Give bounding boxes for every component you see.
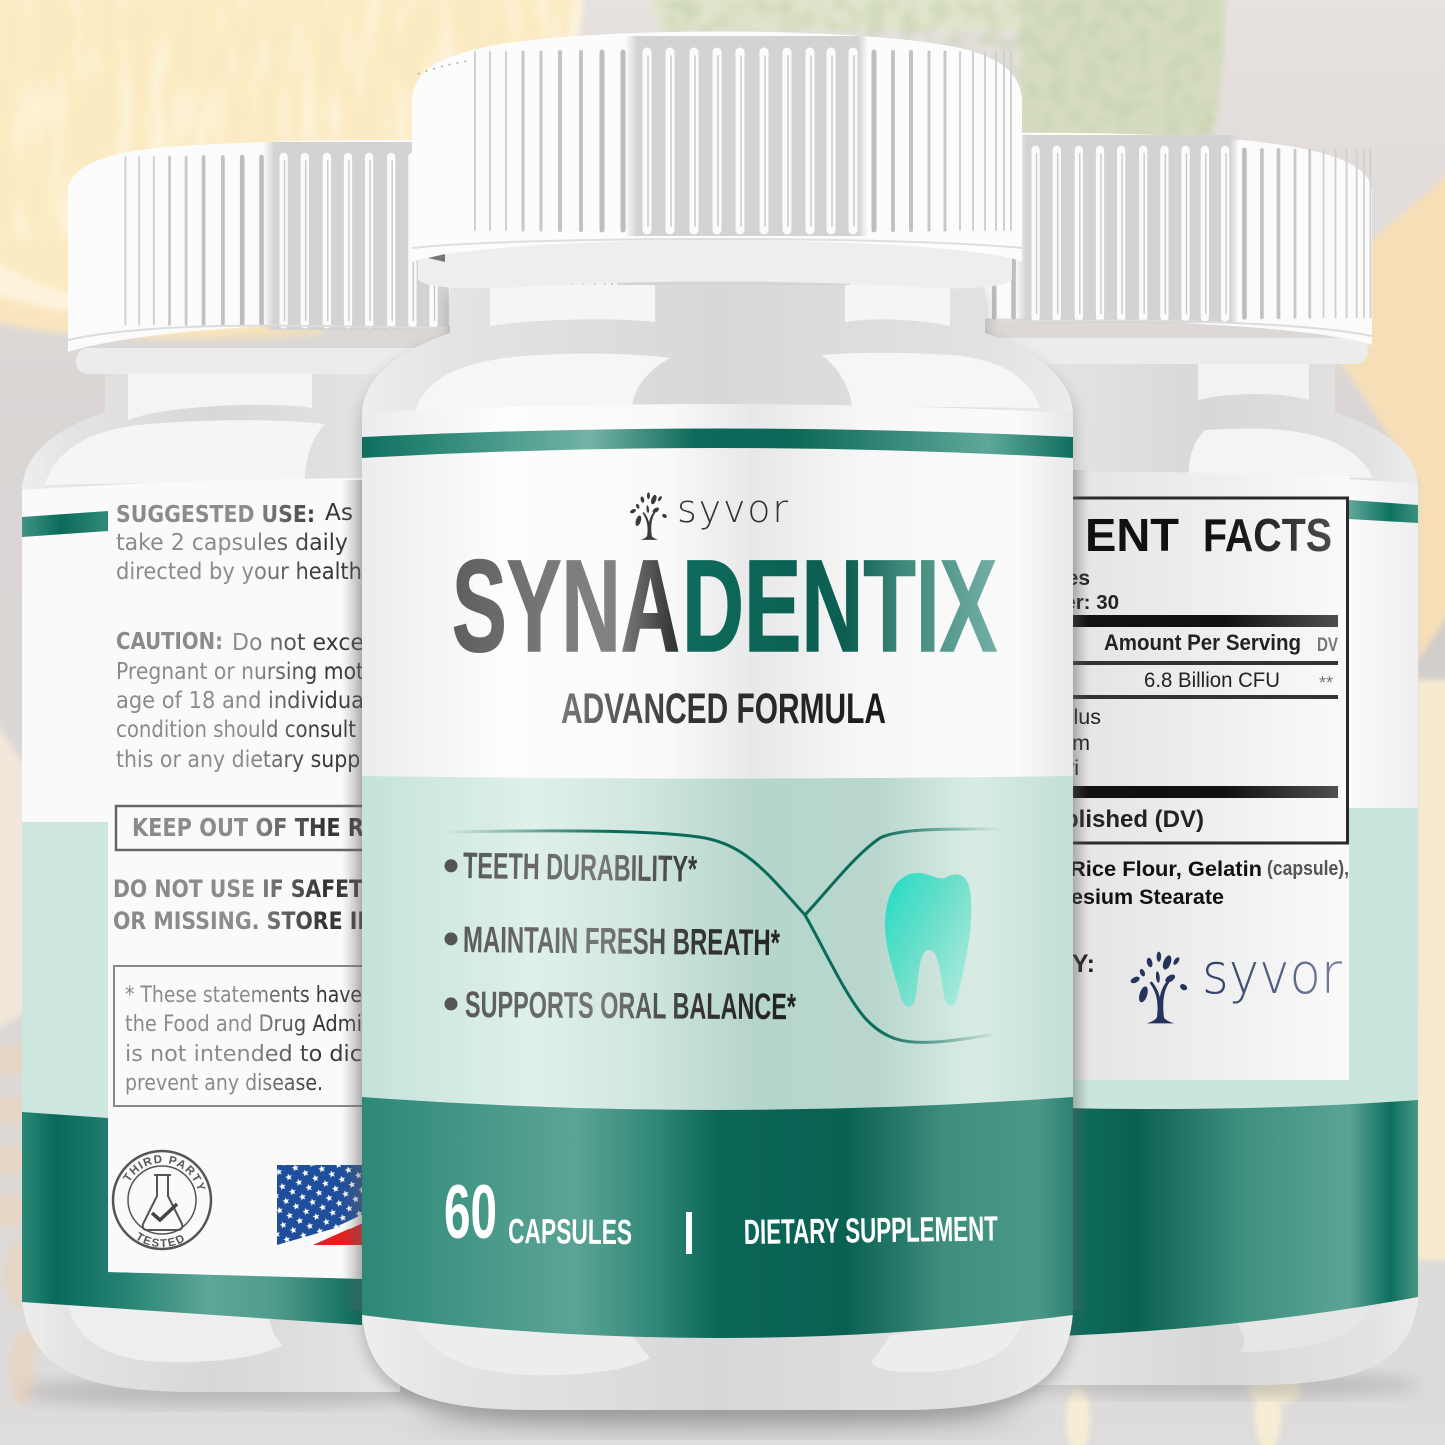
other ingredients: Magnesium Stearate: [1015, 885, 1224, 909]
background: pale left wedge: [0, 700, 28, 1040]
dietary supplement: DIETARY SUPPLEMENT: [744, 1209, 998, 1252]
neck reflections: [490, 285, 950, 326]
title: SYNA: [452, 532, 680, 679]
benefit two: [444, 919, 781, 963]
right label green: [1060, 1100, 1418, 1336]
caution text: age of 18 and individua: [116, 688, 364, 714]
benefit one: TEETH DURABILITY*: [463, 845, 698, 890]
brand logo: [630, 487, 788, 540]
suggested use text: directed by your health: [116, 559, 362, 585]
subtitle: ADVANCED FORMULA: [561, 685, 886, 733]
strain list: Lactobacillus: [977, 705, 1101, 729]
syvor logo: syvor: [1202, 942, 1342, 1007]
left neck highlight: [128, 372, 312, 420]
title: [452, 532, 997, 679]
benefit three: SUPPORTS ORAL BALANCE*: [465, 984, 797, 1027]
background: pale seeds at lower right: [1066, 1376, 1301, 1445]
left bottle: [22, 140, 620, 1412]
neck ring: [418, 236, 1012, 288]
right neck highlight: [1198, 352, 1309, 400]
disclaimer box: * These statements have: [125, 983, 362, 1008]
suggested use text: [116, 500, 362, 585]
left label stripe: [22, 511, 108, 537]
caution text: [116, 629, 366, 773]
caution text: this or any dietary suppl: [116, 747, 366, 773]
right shoulder highlight: [1189, 428, 1373, 478]
center label white: [362, 404, 1073, 800]
left white panel: [108, 486, 400, 1280]
benefits list: [444, 845, 797, 1027]
center cap: [412, 32, 1022, 262]
benefit two: MAINTAIN FRESH BREATH*: [463, 919, 781, 963]
third party tested seal: [112, 1150, 212, 1250]
left bottom highlight: [68, 1300, 282, 1362]
serving lines: Capsules: [997, 567, 1090, 590]
right label mint: [1060, 808, 1418, 1108]
background: broccoli: [645, 0, 1226, 140]
soft shadow of center bottle: [362, 293, 1073, 1418]
right bottle shadow: [1073, 470, 1089, 1310]
benefit three: [444, 984, 797, 1027]
safety warning: [113, 875, 365, 935]
suggested use text: SUGGESTED USE:: [116, 502, 315, 528]
background: grey wedge on right: [1418, 590, 1445, 700]
caution text: Pregnant or nursing mot: [116, 659, 364, 685]
icon: tooth: [885, 873, 971, 1007]
capsule count: CAPSULES: [508, 1212, 632, 1252]
right cap: [850, 133, 1372, 345]
left collar: [76, 348, 456, 374]
shoulder highlights: [415, 353, 1040, 412]
cfu row: 6.8 Billion CFU: [1144, 668, 1280, 692]
capsule count: [444, 1170, 632, 1255]
background: almonds at lower left: [0, 1046, 75, 1406]
amount per serving: Amount Per Serving: [1104, 630, 1301, 655]
right bottle shadow on ground: [1040, 1373, 1420, 1397]
right bottle: [850, 133, 1420, 1397]
brand logo: syvor: [677, 487, 788, 531]
keep out box: [116, 806, 376, 850]
background: right orange wedge: [1340, 160, 1445, 665]
center bottle: [362, 32, 1073, 1432]
caution text: CAUTION:: [116, 629, 223, 655]
supplement facts box: [959, 498, 1348, 843]
right label white: [1060, 472, 1418, 820]
connector curves: [447, 829, 1000, 1042]
right white panel: [1060, 476, 1349, 1080]
supplement facts heading: FACTS: [1203, 509, 1332, 561]
center label mint: [362, 776, 1073, 1120]
other ingredients: Rice Flour, Gelatin: [1070, 857, 1262, 881]
flask icon: [143, 1175, 182, 1230]
syvor logo: [1130, 942, 1342, 1023]
thick rule: [1000, 615, 1338, 627]
right collar: [990, 338, 1368, 364]
benefit one: [444, 845, 698, 890]
supplement facts box: **: [1319, 673, 1333, 693]
left label mint: [22, 822, 108, 1122]
disclaimer box: [114, 966, 384, 1106]
manufactured by: BY:: [1054, 950, 1095, 978]
center bottle body: [362, 285, 1073, 1410]
left bottle shadow edge: [342, 480, 362, 1310]
strain list: [959, 705, 1101, 780]
title: DENTIX: [682, 532, 997, 679]
usa flag: [277, 1165, 380, 1245]
supplement facts box: Container: 30: [988, 591, 1119, 614]
right bottom highlight: [1232, 1300, 1375, 1352]
right label stripe: [1349, 500, 1418, 523]
supplement facts heading: ENT: [1085, 509, 1179, 561]
other ingredients: [1015, 857, 1349, 909]
safety warning: OR MISSING. STORE II: [113, 907, 365, 935]
left bottle body: [22, 370, 400, 1392]
left cap: [68, 140, 620, 352]
bottom highlights: [415, 1318, 1023, 1375]
other ingredients: (capsule),: [1267, 858, 1349, 880]
strain list: Lactobacillum: [959, 731, 1090, 755]
right bottle body: [1000, 362, 1418, 1385]
ground shadow under center bottle: [417, 1392, 1017, 1432]
disclaimer box: prevent any disease.: [125, 1071, 323, 1096]
left bottle shadow on ground: [20, 1378, 440, 1406]
keep out box: KEEP OUT OF THE R: [132, 813, 364, 842]
left shoulder highlight: [45, 420, 325, 485]
safety warning: DO NOT USE IF SAFET: [113, 875, 364, 903]
daily value note: Not Established (DV): [967, 806, 1204, 833]
supplement facts box: DV: [1317, 635, 1338, 656]
background: pale grain on right: [1416, 680, 1445, 1260]
disclaimer box: is not intended to dic: [125, 1042, 362, 1067]
strain list: Reuteri: [1010, 756, 1079, 780]
center label stripe: [362, 428, 1073, 458]
suggested use text: take 2 capsules daily: [116, 530, 348, 556]
disclaimer box: the Food and Drug Admi: [125, 1012, 362, 1037]
check mark: [152, 1204, 177, 1220]
third party tested seal: THIRD PARTY: [122, 1155, 206, 1189]
caution text: Do not exce: [232, 630, 364, 656]
left label white: [22, 478, 400, 1000]
caution text: condition should consult: [116, 717, 356, 743]
capsule count: 60: [444, 1170, 497, 1255]
center label green: [362, 1097, 1073, 1338]
supplement facts heading: [1085, 509, 1332, 561]
thick rule lower: [1000, 786, 1338, 798]
suggested use text: As: [325, 500, 353, 526]
left label green: [22, 1112, 362, 1325]
background: orange slice: [0, 0, 585, 340]
third party tested seal: TESTED: [137, 1232, 184, 1248]
cap notch: [428, 254, 445, 262]
divider: [686, 1212, 692, 1254]
